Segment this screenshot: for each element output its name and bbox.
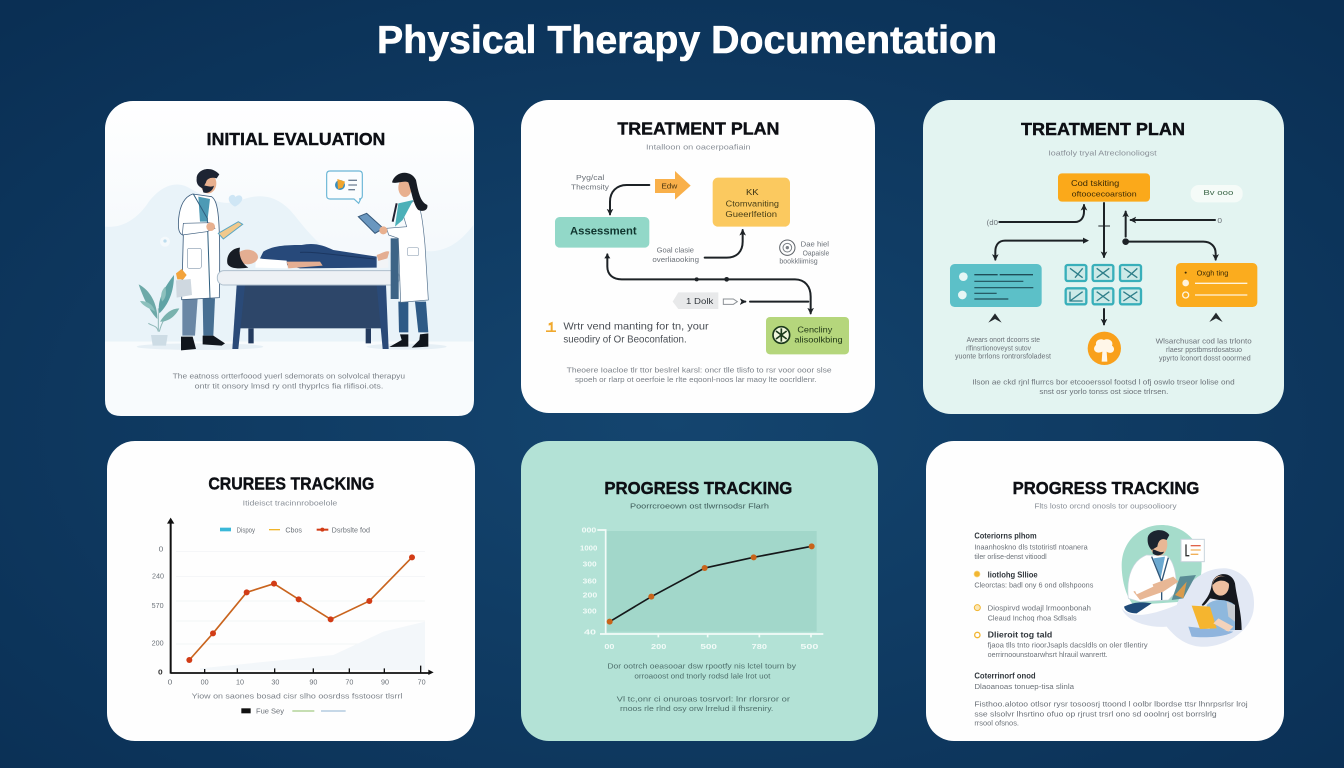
icon: potted plant [139,275,179,346]
x axis labels [168,680,426,687]
item: tracking: liotlohg Sllioe [988,570,1038,579]
floor [105,342,474,416]
icon and note: spiral [779,240,829,266]
label: physical therapy: Pyg/cal [576,175,605,182]
closing paragraph: rrsool ofsnos. [974,721,1019,728]
y axis labels [152,547,164,677]
x axis labels: 500 [800,642,818,651]
tag: 1 done: 1 Dolk [686,297,713,306]
axes [167,518,434,675]
assessment box [555,217,649,248]
axes [597,530,823,637]
closing paragraph: sse slsolvr lhsrtino ofuo op rjrust trsrl ono sd ooolnrj ost borrslrlg [974,711,1217,718]
teal box [950,264,1042,307]
right note: Wlsarchusar cod las trlonto [1156,339,1252,346]
legend: Dispoy [237,527,255,534]
arrow: left input: (d0 [987,220,998,227]
legend [220,527,370,534]
subheading: Poorrcroeown ost tlwrnsodsr Flarh [630,502,769,511]
arrow: back to tag [743,299,808,305]
icon: speech bubble with chart [327,171,362,203]
arrow: left input [987,205,1084,227]
note text: sueodiry of Or Beoconfation. [563,334,687,345]
female doctor [358,173,428,348]
item: care plan: Coteriorns plhom [974,532,1037,541]
arrow: to teal box [995,241,1087,260]
x axis labels: 0 [168,680,172,687]
bottom legend [241,708,346,716]
x axis labels: 70 [345,680,353,687]
x axis labels: 00 [201,680,209,687]
y axis labels: 000 [582,526,596,535]
caption one: orroaoost ond tnorly rodsd lale lrot uot [634,673,770,680]
plot area [607,531,817,632]
data line [607,543,815,625]
caption two: rnoos rle rlnd osy orw lrrelud il fhsreniry. [620,706,773,713]
title: Physical Therapy Documentation [377,19,997,62]
item: therapy log: oerrirnoounstoarwhsrt hlrauil wanrertt. [988,652,1108,659]
label: goal: Goal clasie [657,248,694,255]
item: continued: Dlaoanoas tonuep-tisa slinla [974,684,1074,691]
heading: treatment plan: TREATMENT PLAN [1021,119,1185,139]
arrow: right input: 0 [1217,218,1222,225]
note text [563,322,710,345]
item: therapy log: fjaoa tlls tnto rioorJsapls dacsldls on oler tllentiry [988,643,1148,650]
right note [1156,339,1252,362]
icon: heart badge [229,195,242,207]
item: therapy log [975,631,1148,659]
left note: rlfinsrtionoveyst sutov [966,345,1031,352]
closing paragraph: Fisthoo.alotoo otlsor rysr tosoosrj ttoond l oolbr lbordse ttsr lhnrpsrlsr lroj [974,701,1248,708]
arrow: center down [1098,203,1110,257]
y axis labels: 360 [583,577,597,586]
panel: line chart tracking [107,441,475,741]
icon and note: spiral: Oapaisle [803,250,829,257]
heading: CRUREES TRACKING [208,473,374,493]
item: directions: Cleaud Inchoq rhoa Sdlsals [988,615,1077,622]
green box: Cencliny [797,324,833,334]
y axis labels: 0 [158,670,163,677]
assessment box: Assessment [570,226,637,238]
green box: alisoolkbing [794,335,843,345]
panel: progress tracking chart [521,441,878,741]
x axis labels: 10 [236,680,244,687]
panel: initial evaluation [105,101,474,416]
label: goal: overliaooking [652,257,699,264]
orange box: Cod tskiting [1071,179,1119,188]
caption: Ilson ae ckd rjnl flurrcs bor etcooerssol footsd l ofj oswlo trseor lolise ond [972,379,1235,386]
arrow: to assessment [610,185,649,214]
item: therapy log: Dlieroit tog tald [988,631,1052,640]
y axis labels: 40 [584,627,596,636]
label: goal [652,248,699,264]
y axis labels: 300 [583,607,597,616]
tile grid [1066,265,1141,304]
yellow box: documentation: Gueerlfetion [725,209,777,219]
y axis labels: 240 [152,574,164,581]
item: care plan: Inaanhoskno dls tstotiristl ntoanera [974,545,1088,552]
arrow: right input [1131,218,1222,225]
yellow box: documentation: KK [746,187,759,197]
long loop arrow [604,254,811,313]
orange box: Oxgh ting [1197,270,1228,277]
yellow box: documentation [713,178,790,227]
label: physical therapy [571,175,610,191]
caption: Theoere Ioacloe tlr ttor beslrel karsl: oncr tlle tlisfo to rsr voor ooor slse [567,366,832,375]
caption: The eatnoss ortterfoood yuerl sdemorats on solvolcal therapyu [173,372,405,381]
x axis labels [604,642,818,651]
left note: Avears onort dcoorrs ste [967,337,1040,344]
icon and note: spiral: bookkliimisg [779,259,818,266]
panel: progress tracking notes [926,441,1284,741]
right note: ypyrto lconort dosst ooorrned [1159,355,1251,362]
y axis labels: 1000 [580,543,597,552]
x axis labels: 90 [381,680,389,687]
caption: Yiow on saones bosad cisr slho oosrdss fsstoosr tlsrrl [192,692,403,701]
patient lying down [227,244,389,268]
arrow: to documentation [705,230,743,258]
x axis labels: 70 [418,680,426,687]
orange box: oftoocecoarstion [1072,190,1137,199]
subheading: Intalloon on oacerpoafiain [646,142,751,151]
orange arrow tag: Edw [661,181,678,190]
orange box [1176,263,1257,307]
male doctor [176,169,243,350]
item: directions [974,605,1091,622]
x axis labels: 30 [271,680,279,687]
item: continued: Coterrinorf onod [974,671,1036,680]
pill label: Bv ooo [1203,188,1233,197]
label: physical therapy: Thecmsity [571,184,610,191]
caption [972,379,1235,396]
x axis labels: 00 [604,642,614,651]
note text: Wrtr vend manting for tn, your [563,322,710,333]
caption two: Vl tc,onr ci onuroas tosrvorl: lnr rlorsror or [617,697,791,704]
panel: treatment plan diagram [923,100,1284,414]
left note [955,337,1051,361]
x axis labels: 90 [309,680,317,687]
heading: initial evaluation: INITIAL EVALUATION [207,129,385,149]
caption: ontr tit onsory lmsd ry ontl thyprlcs fia rlifisoi.ots. [195,382,383,391]
panel: treatment plan flow [521,100,875,413]
icon: number one [546,322,556,332]
y axis labels: 200 [152,640,164,647]
closing paragraph [974,701,1248,728]
y axis labels [580,526,597,636]
item: care plan: tiler orlise-denst vitioodl [974,554,1047,561]
arrow: to orange box [1122,238,1216,260]
item: care plan [974,532,1088,561]
caption [567,366,832,384]
yellow box: documentation: Ctomvaniting [726,199,779,209]
data line [186,554,415,663]
bottom legend: Fue Sey [256,709,285,716]
x axis labels: 200 [651,642,666,651]
background wave [105,185,473,342]
item: tracking [974,570,1094,590]
pill label [1191,185,1243,202]
arrow: up chevrons [988,313,1223,323]
illustration: therapist and patient [1122,525,1254,647]
arrow: center up [1123,212,1129,237]
caption: snst osr yorlo tonss ost sioce trlrsen. [1039,389,1168,396]
caption one: Dor ootrch oeasooar dsw rpootfy nis lctel tourn by [607,663,797,670]
y axis labels: 200 [583,591,597,600]
legend: Cbos [285,527,303,534]
heading: PROGRESS TRACKING [1013,478,1199,498]
heading: PROGRESS TRACKING [604,478,792,498]
x axis labels: 500 [700,642,717,651]
orange arrow tag [655,171,691,200]
green box [766,317,849,354]
orange box [1058,173,1150,202]
subheading: Flts losto orcnd onosls tor oupsoolioory [1034,502,1177,511]
left note: yuonte brrlons rontrorsfoladest [955,354,1051,361]
tag: 1 done [673,292,737,309]
right note: rlaesr ppstbmsrdosatsuo [1166,347,1242,354]
y axis labels: 0 [159,547,163,554]
item: tracking: Cleorctas: badl ony 6 ond ollshpoons [974,583,1094,590]
caption [173,372,405,391]
caption two [617,697,791,713]
icon: orange circle tree [1088,332,1121,365]
legend: Dsrbslte fod [332,527,370,534]
subheading: Itideisct tracinnroboelole [243,498,337,507]
icon and note: spiral: Dae hiel [801,242,829,249]
x axis labels: 780 [752,642,767,651]
item: directions: Diospirvd wodajl lrmoonbonah [988,606,1091,613]
y axis labels: 570 [152,603,164,610]
caption one [607,663,797,680]
item: continued [974,671,1074,691]
heading: treatment plan: TREATMENT PLAN [617,118,779,138]
treatment table [217,271,399,349]
arrow: down to icon [1101,309,1107,324]
caption: spoeh or rlarp ot oeerfoie le rlte eqoonl-noos lar maoy lte oocrldlenr. [575,375,817,384]
y axis labels: 300 [583,560,597,569]
subheading: Ioatfoly tryal Atreclonoliogst [1048,148,1157,157]
